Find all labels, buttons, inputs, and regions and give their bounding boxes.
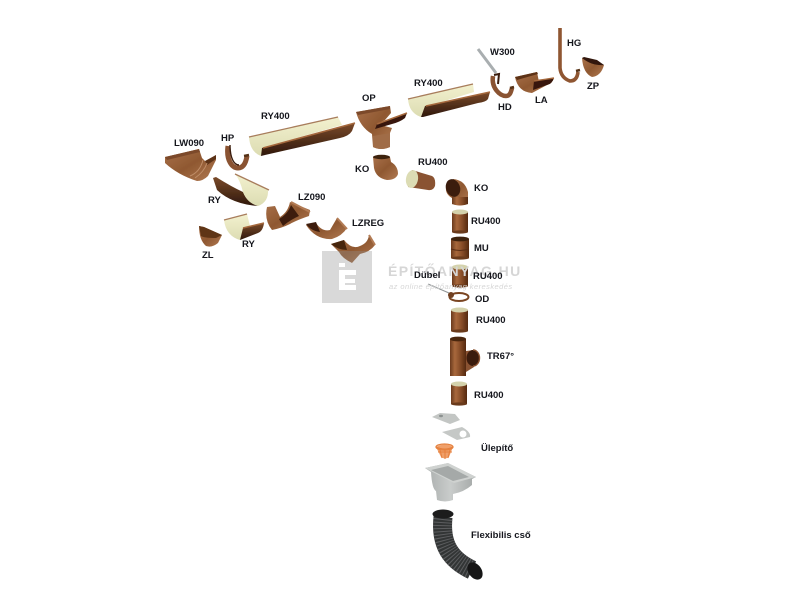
part labels: RY [242, 239, 256, 250]
part labels: ZL [202, 250, 214, 261]
part labels: LA [535, 95, 548, 106]
part labels: LW090 [174, 138, 204, 149]
flexible pipe [432, 510, 486, 583]
hanger: HD [493, 74, 514, 96]
hanger: HP [228, 145, 249, 168]
pipe: RU400 1 [452, 210, 468, 234]
part labels: MU [474, 243, 489, 254]
elbow: KO right [443, 177, 468, 206]
inner corner: LZ090 [266, 202, 310, 230]
connector: LZREG lower [331, 235, 375, 263]
part labels: RY400 [414, 78, 443, 89]
part labels: Flexibilis cső [471, 530, 531, 541]
watermark logo [322, 251, 372, 303]
settling tank: plate 1 [432, 413, 460, 424]
clip: OD with dowel [428, 284, 468, 301]
pipe: RU400 3 [451, 308, 468, 333]
gutter end: LA [515, 72, 554, 93]
settling tank: orange basket [436, 444, 453, 459]
settling tank: plate 2 [442, 427, 470, 440]
watermark text: az online építőanyag kereskedés [389, 282, 513, 291]
part labels [174, 38, 600, 541]
part labels: HP [221, 133, 235, 144]
part labels: RU400 [474, 390, 504, 401]
part labels: OP [362, 93, 376, 104]
part labels: RY [208, 195, 222, 206]
strap: W300 [478, 49, 496, 73]
part labels: KO [474, 183, 488, 194]
part labels: HG [567, 38, 581, 49]
outlet: OP [356, 106, 407, 149]
gutter corner: LW090 [165, 149, 216, 181]
part labels: RU400 [418, 157, 448, 168]
part labels: LZREG [352, 218, 384, 229]
part labels: RU400 [473, 271, 503, 282]
socket: MU [451, 237, 469, 260]
gutter: RY400 left long [249, 117, 355, 156]
branch: TR67 [450, 337, 480, 376]
gutter end: ZP [582, 57, 604, 77]
part labels: OD [475, 294, 489, 305]
settling tank: box [425, 463, 476, 502]
gutter: RY400 right [408, 84, 490, 117]
part labels: W300 [490, 47, 515, 58]
elbow: KO left [373, 155, 398, 180]
part labels: Ülepítő [481, 443, 513, 454]
exploded diagram of gutter parts [165, 28, 604, 583]
part labels: RU400 [471, 216, 501, 227]
part labels: KO [355, 164, 369, 175]
gutter: RY upper [213, 174, 269, 206]
part labels: RY400 [261, 111, 290, 122]
hanger: HG [560, 28, 580, 81]
connector: LZREG upper [306, 218, 347, 239]
part labels: RU400 [476, 315, 506, 326]
pipe: RU400 2 [452, 264, 468, 288]
part labels: Dübel [414, 270, 440, 281]
part labels: HD [498, 102, 512, 113]
gutter: RY lower [224, 214, 264, 240]
part labels: ZP [587, 81, 600, 92]
pipe: RU400 4 [451, 382, 467, 406]
watermark text: ÉPÍTŐANYAG.HU [388, 262, 522, 279]
watermark text [388, 262, 522, 291]
part labels: TR67° [487, 351, 514, 362]
gutter end: ZL [199, 226, 222, 247]
pipe: RU400 diagonal [405, 169, 435, 190]
part labels: LZ090 [298, 192, 325, 203]
